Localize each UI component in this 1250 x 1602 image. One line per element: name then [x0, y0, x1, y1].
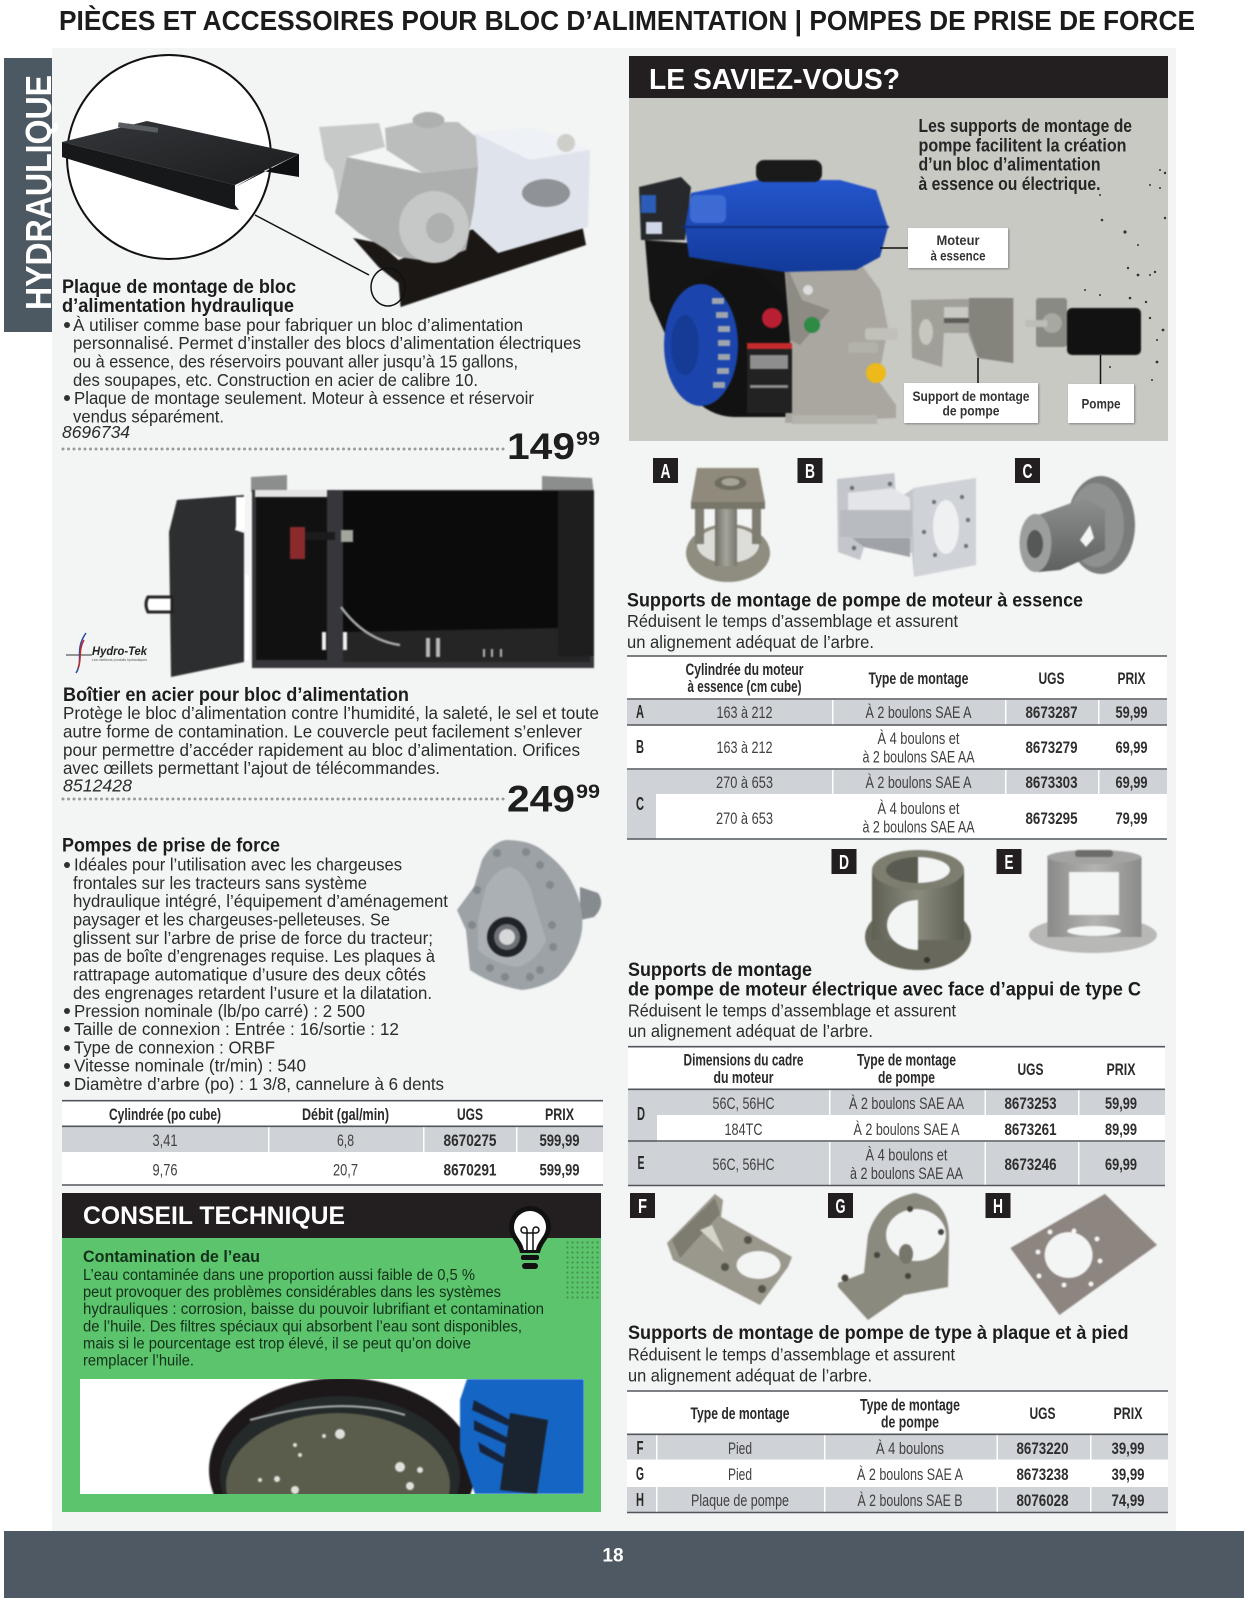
enclosure description: avec œillets permettant l’ajout de télécommandes.	[63, 758, 440, 778]
tip text: peut provoquer des problèmes considérables dans les systèmes	[83, 1284, 501, 1301]
table: plate and foot mounts: G	[636, 1464, 644, 1484]
table: plate and foot mounts: H	[636, 1490, 644, 1510]
badge D	[832, 849, 856, 874]
callout circle on plate	[67, 55, 271, 259]
pump description: pas de boîte d’engrenages requise. Les plaques à	[73, 946, 435, 966]
table: electric mounts: 184TC	[724, 1120, 762, 1139]
table: electric mounts: du moteur	[714, 1068, 774, 1087]
saviez-vous header bar	[629, 56, 1168, 98]
badge G	[828, 1193, 853, 1218]
conseil header bar	[62, 1193, 601, 1238]
table: PTO pump specifications: 8670291	[444, 1160, 496, 1180]
badge A	[653, 458, 678, 483]
tip text	[83, 1267, 544, 1370]
icon: mount E	[1029, 850, 1157, 953]
table: gasoline mounts: 8673279	[1026, 738, 1078, 757]
heading: plate and foot mounts: Supports de montage de pompe de type à plaque et à pied	[628, 1322, 1128, 1344]
panel: conseil technique	[62, 1193, 601, 1512]
plate description: vendus séparément.	[73, 406, 224, 426]
product: steel enclosure	[63, 475, 600, 820]
icon: mount A	[686, 468, 770, 582]
label: pompe: Pompe	[1082, 396, 1121, 412]
pump heading: Pompes de prise de force	[62, 834, 280, 856]
pump description: Idéales pour l’utilisation avec les chargeuses	[74, 854, 402, 874]
table: electric mounts: 59,99	[1105, 1094, 1137, 1113]
table: gasoline mounts: 8673287	[1026, 703, 1078, 722]
table: PTO pump specifications: Cylindrée (po cube)	[109, 1105, 221, 1124]
table: electric mounts: à 2 boulons SAE AA	[850, 1164, 963, 1183]
heading: gasoline mounts: Supports de montage de pompe de moteur à essence	[627, 590, 1083, 612]
badge C	[1015, 458, 1040, 483]
table: gasoline mounts: PRIX	[1118, 669, 1146, 688]
description: plate and foot mounts: Réduisent le temps d’assemblage et assurent	[628, 1344, 955, 1364]
pump description: Taille de connexion : Entrée : 16/sortie : 12	[74, 1019, 399, 1039]
icon: mount B	[837, 473, 976, 577]
enclosure SKU: 8512428	[63, 776, 132, 796]
table: gasoline mounts: à 2 boulons SAE AA	[862, 818, 975, 836]
enclosure heading: Boîtier en acier pour bloc d’alimentation	[63, 684, 409, 706]
description: plate and foot mounts	[628, 1344, 955, 1386]
pump description: Type de connexion : ORBF	[74, 1038, 275, 1058]
table: electric mounts: À 2 boulons SAE A	[854, 1120, 960, 1139]
badge A: A	[660, 461, 670, 483]
table: gasoline mounts: Type de montage	[868, 669, 968, 688]
table: gasoline mounts: UGS	[1038, 669, 1064, 688]
pump description: frontales sur les tracteurs sans système	[73, 873, 367, 893]
label: moteur a essence	[880, 228, 1008, 268]
table: gasoline mounts: 163 à 212	[716, 738, 772, 757]
pump description: paysager et les chargeuses-pelleteuses. Se	[73, 910, 390, 930]
table: gasoline mounts: 270 à 653	[716, 773, 773, 792]
description: plate and foot mounts: un alignement adéquat de l’arbre.	[628, 1366, 872, 1386]
section: electric motor mounts	[628, 849, 1165, 1186]
product: mounting plate	[62, 55, 600, 467]
tip text: de l’huile. Des filtres spéciaux qui absorbent l’eau sont disponibles,	[83, 1318, 522, 1336]
plate description: À utiliser comme base pour fabriquer un bloc d’alimentation	[73, 315, 523, 335]
plate description: Plaque de montage seulement. Moteur à essence et réservoir	[74, 388, 534, 408]
table: gasoline mounts: Cylindrée du moteur	[686, 660, 804, 679]
saviez-vous text: pompe facilitent la création	[918, 136, 1126, 156]
pump description: Pression nominale (lb/po carré) : 2 500	[74, 1001, 365, 1021]
table: PTO pump specifications: 8670275	[444, 1131, 496, 1150]
table: gasoline mounts: À 4 boulons et	[878, 729, 960, 748]
icon: mount H	[1010, 1194, 1157, 1315]
icon: steel mounting plate	[62, 121, 299, 210]
page title: PIÈCES ET ACCESSOIRES POUR BLOC D’ALIMENTATION | POMPES DE PRISE DE FORCE	[59, 5, 1195, 36]
table: PTO pump specifications: UGS	[457, 1105, 483, 1124]
table: electric mounts: UGS	[1018, 1060, 1044, 1079]
table: plate and foot mounts: 39,99	[1112, 1465, 1144, 1484]
table: electric mounts	[628, 1047, 1165, 1186]
heading: electric mounts: de pompe de moteur électrique avec face d’appui de type C	[628, 978, 1141, 1000]
footer bar with page number: 18	[602, 1546, 624, 1566]
pump description: rattrapage automatique d’usure des deux côtés	[73, 964, 426, 984]
enclosure price: 99	[576, 782, 600, 803]
table: electric mounts: PRIX	[1106, 1060, 1136, 1079]
table: plate and foot mounts: 39,99	[1112, 1439, 1144, 1458]
icon: mount D	[865, 850, 971, 970]
plate heading: Plaque de montage de bloc	[62, 276, 296, 298]
table: electric mounts: D	[637, 1104, 645, 1124]
table: plate and foot mounts: UGS	[1030, 1404, 1056, 1423]
table: gasoline mounts	[627, 656, 1167, 839]
photo: oil pan with water	[80, 1379, 584, 1494]
saviez-vous header bar: LE SAVIEZ-VOUS?	[649, 64, 900, 96]
plate description: personnalisé. Permet d’installer des blocs d’alimentation électriques	[73, 333, 581, 353]
description: gasoline mounts: Réduisent le temps d’assemblage et assurent	[627, 611, 958, 631]
table: plate and foot mounts: Type de montage	[690, 1404, 790, 1423]
table: PTO pump specifications: 9,76	[152, 1160, 178, 1180]
table: plate and foot mounts: de pompe	[881, 1412, 939, 1432]
table: electric mounts: 8673246	[1004, 1155, 1056, 1174]
table: gasoline mounts: 8673295	[1026, 809, 1078, 828]
tip heading: Contamination de l’eau	[83, 1247, 260, 1266]
table: plate and foot mounts: 74,99	[1112, 1491, 1144, 1510]
table: gasoline mounts: 79,99	[1116, 809, 1148, 828]
table: PTO pump specifications	[62, 1101, 603, 1185]
table: gasoline mounts: A	[636, 702, 644, 722]
table: PTO pump specifications: 6,8	[337, 1131, 354, 1150]
badge F: F	[638, 1196, 647, 1218]
table: electric mounts: À 4 boulons et	[866, 1146, 948, 1164]
table: electric mounts: 89,99	[1105, 1120, 1137, 1139]
table: plate and foot mounts: Pied	[728, 1439, 752, 1458]
table: plate and foot mounts: À 2 boulons SAE A	[857, 1465, 963, 1484]
tip text: mais si le pourcentage est trop élevé, il se peut qu’on doive	[83, 1336, 471, 1352]
enclosure dotted leader	[63, 798, 505, 800]
badge F	[630, 1193, 655, 1218]
table: plate and foot mounts: 8673220	[1016, 1439, 1068, 1458]
tip text: L’eau contaminée dans une proportion aussi faible de 0,5 %	[83, 1267, 475, 1284]
table: electric mounts: 56C, 56HC	[712, 1155, 774, 1174]
speckles	[1084, 169, 1166, 381]
heading: electric mounts: Supports de montage	[628, 959, 812, 981]
plate SKU: 8696734	[62, 422, 130, 442]
description: gasoline mounts: un alignement adéquat de l’arbre.	[627, 632, 874, 652]
saviez-vous text: d’un bloc d’alimentation	[918, 154, 1100, 174]
table: plate and foot mounts: À 4 boulons	[876, 1439, 944, 1458]
panel: le saviez-vous	[629, 56, 1168, 441]
table: plate and foot mounts: Plaque de pompe	[691, 1491, 789, 1510]
table: electric mounts: 69,99	[1105, 1155, 1137, 1174]
icon: mount G	[838, 1193, 949, 1320]
table: electric mounts: de pompe	[878, 1068, 935, 1087]
conseil header bar: CONSEIL TECHNIQUE	[83, 1202, 345, 1230]
label: pompe	[1068, 355, 1134, 423]
label: moteur a essence: Moteur	[936, 232, 980, 248]
badge C: C	[1022, 461, 1032, 483]
icon: steel enclosure photo	[146, 475, 594, 677]
pump description: des engrenages retardent l’usure et la dilatation.	[73, 983, 432, 1003]
table: gasoline mounts: 69,99	[1116, 773, 1148, 792]
table: plate and foot mounts: À 2 boulons SAE B	[858, 1491, 962, 1510]
plate heading	[62, 276, 296, 317]
plate price	[507, 426, 600, 467]
badge H: H	[993, 1196, 1003, 1218]
section tab: hydraulique: HYDRAULIQUE	[18, 75, 59, 310]
saviez-vous text: à essence ou électrique.	[918, 174, 1100, 194]
table: electric mounts: Dimensions du cadre	[684, 1050, 804, 1070]
table: electric mounts: 56C, 56HC	[712, 1094, 774, 1113]
table: electric mounts: 8673261	[1004, 1120, 1056, 1139]
section: plate and foot mounts	[627, 1193, 1168, 1512]
pump description: Diamètre d’arbre (po) : 1 3/8, cannelure à 6 dents	[74, 1074, 444, 1094]
table: PTO pump specifications: 3,41	[152, 1131, 178, 1150]
table: gasoline mounts: C	[636, 794, 644, 814]
icon: gasoline engine	[639, 160, 898, 424]
table: plate and foot mounts: 8673238	[1016, 1465, 1068, 1484]
table: plate and foot mounts: F	[636, 1438, 644, 1458]
table: gasoline mounts: 59,99	[1116, 703, 1148, 722]
logo: Hydro-Tek	[66, 633, 148, 673]
description: gasoline mounts	[627, 611, 958, 652]
table: gasoline mounts: 69,99	[1116, 738, 1148, 757]
table: gasoline mounts: B	[636, 737, 644, 757]
table: electric mounts: À 2 boulons SAE AA	[849, 1094, 964, 1113]
table: PTO pump specifications: Débit (gal/min)	[302, 1105, 389, 1124]
enclosure description: pour permettre d’accéder rapidement au bloc d’alimentation. Orifices	[63, 740, 580, 760]
section tab: hydraulique	[4, 58, 59, 332]
table: gasoline mounts: À 4 boulons et	[878, 799, 960, 818]
badge E	[996, 849, 1022, 874]
badge G: G	[836, 1196, 846, 1218]
table: gasoline mounts: À 2 boulons SAE A	[866, 773, 972, 792]
enclosure description: Protège le bloc d’alimentation contre l’humidité, la saleté, le sel et toute	[63, 703, 599, 723]
pump description: hydraulique intégré, l’équipement d’aménagement	[73, 891, 448, 911]
plate heading: d’alimentation hydraulique	[62, 295, 294, 317]
enclosure description: autre forme de contamination. Le couvercle peut facilement s’enlever	[63, 722, 582, 742]
label: support de montage de pompe: Support de montage	[912, 388, 1030, 404]
plate price: 149	[507, 426, 575, 467]
logo: Hydro-Tek: Hydro-Tek	[92, 644, 148, 658]
plate dotted leader	[63, 448, 505, 450]
icon: lightbulb	[509, 1206, 551, 1269]
table: plate and foot mounts: Pied	[728, 1465, 752, 1484]
description: electric mounts: un alignement adéquat de l’arbre.	[628, 1021, 873, 1041]
footer bar with page number	[4, 1531, 1244, 1598]
table: plate and foot mounts: PRIX	[1114, 1404, 1143, 1423]
label: support de montage de pompe: de pompe	[942, 402, 1000, 418]
product: PTO pumps	[62, 834, 603, 1185]
label: moteur a essence: à essence	[930, 248, 986, 264]
section: gasoline engine mounts	[627, 458, 1167, 839]
badge B: B	[805, 461, 815, 483]
table: plate and foot mounts: 8076028	[1016, 1491, 1068, 1510]
table: gasoline mounts: À 2 boulons SAE A	[866, 703, 972, 722]
description: electric mounts: Réduisent le temps d’assemblage et assurent	[628, 1000, 956, 1020]
table: electric mounts: 8673253	[1004, 1094, 1056, 1113]
saviez-vous text	[918, 116, 1132, 194]
enclosure description	[63, 703, 599, 778]
description: electric mounts	[628, 1000, 956, 1041]
enclosure price: 249	[507, 778, 575, 820]
tip text: remplacer l’huile.	[83, 1352, 194, 1370]
saviez-vous text: Les supports de montage de	[918, 116, 1132, 136]
badge B	[798, 458, 822, 483]
icon: faded power unit photo	[319, 112, 590, 307]
pump description: Vitesse nominale (tr/min) : 540	[74, 1056, 306, 1076]
table: PTO pump specifications: 599,99	[540, 1131, 580, 1150]
pump description: glissent sur l’arbre de prise de force du tracteur;	[73, 928, 433, 948]
table: gasoline mounts: 8673303	[1026, 773, 1078, 792]
table: PTO pump specifications: PRIX	[545, 1105, 574, 1124]
icon: PTO pump photo	[457, 840, 601, 990]
badge D: D	[839, 852, 849, 874]
icon: hydraulic pump	[1026, 298, 1141, 355]
table: PTO pump specifications: 20,7	[333, 1160, 358, 1180]
pump description	[64, 854, 448, 1094]
plate description: des soupapes, etc. Construction en acier de calibre 10.	[73, 370, 478, 390]
table: electric mounts: Type de montage	[857, 1050, 956, 1070]
plate description: ou à essence, des réservoirs pouvant aller jusqu’à 15 gallons,	[73, 352, 518, 372]
table: plate and foot mounts	[627, 1391, 1168, 1512]
table: PTO pump specifications: 599,99	[540, 1160, 580, 1180]
table: gasoline mounts: à 2 boulons SAE AA	[862, 748, 975, 766]
halftone decoration	[566, 1240, 601, 1300]
icon: pump mount	[911, 298, 1014, 367]
badge E: E	[1004, 852, 1014, 874]
label: support de montage de pompe	[904, 358, 1038, 423]
icon: mount C	[1020, 476, 1135, 574]
enclosure price	[507, 778, 600, 820]
callout line and small circle	[255, 215, 405, 306]
plate price: 99	[576, 429, 600, 450]
table: gasoline mounts: 163 à 212	[716, 703, 772, 722]
icon: mount F	[667, 1194, 792, 1305]
logo: Hydro-Tek: Les meilleurs produits hydrauliques	[92, 657, 147, 662]
badge H	[986, 1193, 1010, 1218]
table: gasoline mounts: 270 à 653	[716, 809, 773, 828]
table: electric mounts: E	[638, 1153, 644, 1173]
plate description	[64, 315, 581, 426]
tip text: hydrauliques : corrosion, baisse du pouvoir lubrifiant et contamination	[83, 1301, 544, 1318]
table: gasoline mounts: à essence (cm cube)	[688, 677, 802, 696]
heading: electric mounts	[628, 959, 1141, 1000]
table: plate and foot mounts: Type de montage	[860, 1396, 960, 1414]
